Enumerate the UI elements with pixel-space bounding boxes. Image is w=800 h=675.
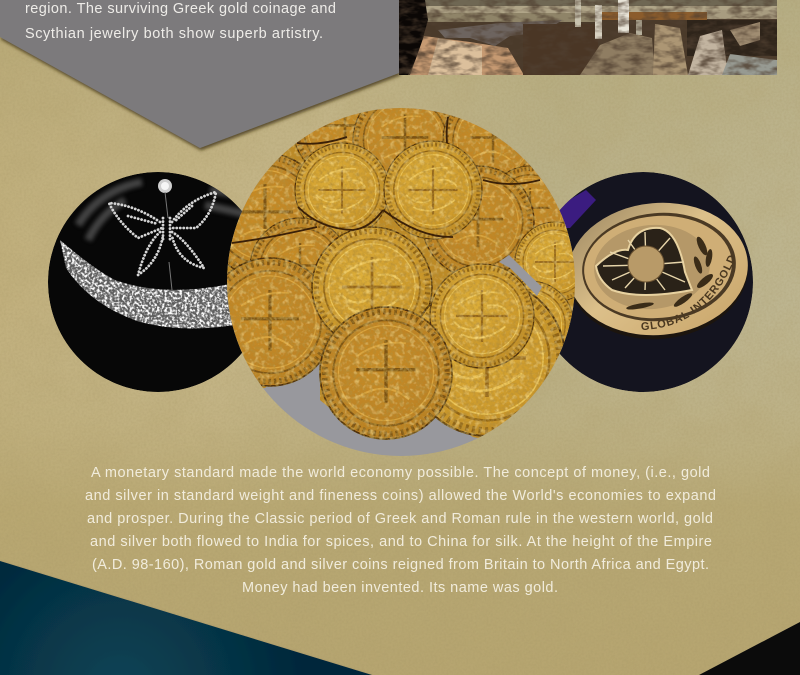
- photo circle: Global Intergold medal on velvet: [560, 172, 753, 392]
- laurel: [626, 235, 715, 311]
- text block: banner text: [25, 1, 336, 42]
- butterfly brooch: [109, 192, 216, 275]
- panel: teal bottom-left wedge: [0, 561, 372, 675]
- bracelet band: [60, 240, 250, 328]
- ribbon: [560, 190, 596, 228]
- medal: GLOBAL INTERGOLD: [641, 256, 732, 330]
- medal inscription: [641, 248, 739, 330]
- heart with sun rays: [596, 228, 692, 295]
- medal: [572, 202, 748, 340]
- photo circle: diamond butterfly brooch and bracelet: [48, 172, 242, 392]
- photo: cave reflected in water: [399, 0, 777, 75]
- photo circle: pile of gold coins: [227, 108, 575, 456]
- text block: monetary standard paragraph: and prosper. During the Classic period of Greek and Roman rule in the western world, gold: [87, 511, 713, 527]
- dark shadow creases between coins: [232, 117, 540, 243]
- panel: black bottom-right wedge: [699, 622, 800, 675]
- text block: banner text: region. The surviving Greek gold coinage and: [25, 1, 336, 17]
- text block: monetary standard paragraph: (A.D. 98-160), Roman gold and silver coins reigned from Britain to North Africa and Egypt.: [92, 557, 709, 573]
- text block: monetary standard paragraph: Money had been invented. Its name was gold.: [242, 580, 558, 596]
- text block: monetary standard paragraph: and silver both flowed to India for spices, and to China for silk. At the height of the Empire: [90, 534, 712, 550]
- text block: monetary standard paragraph: A monetary standard made the world economy possible. The concept of money, (i.e., gold: [91, 465, 710, 481]
- text block: monetary standard paragraph: and silver in standard weight and fineness coins) allowed the World's economies to expand: [85, 488, 716, 504]
- text block: monetary standard paragraph: [85, 465, 716, 596]
- text block: banner text: Scythian jewelry both show superb artistry.: [25, 26, 323, 42]
- panel: grey pentagon text banner: [0, 0, 399, 148]
